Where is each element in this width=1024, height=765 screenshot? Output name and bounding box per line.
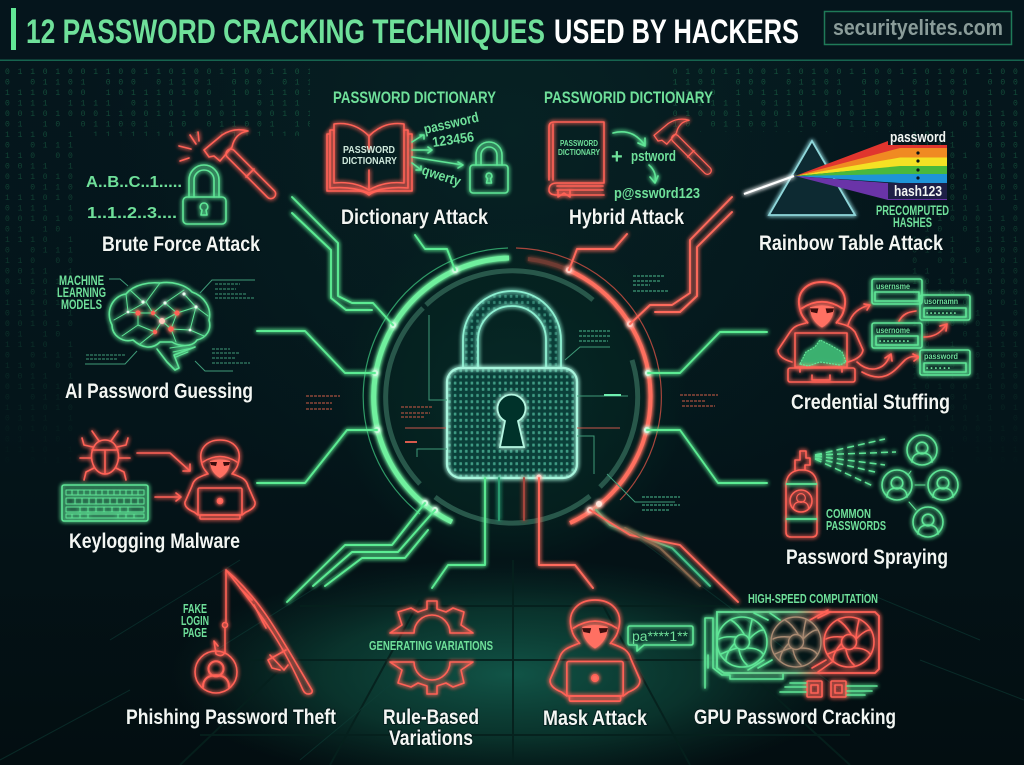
label: Rainbow Table Attack (759, 232, 943, 255)
curved arrows (848, 304, 947, 377)
caption: LEARNING (57, 285, 106, 300)
circuit wires: red (524, 197, 738, 602)
caption (181, 602, 209, 640)
form text: •••••• (926, 365, 951, 372)
sample words: qwerty (420, 162, 463, 189)
icon: green lock (470, 142, 508, 193)
caption: PASSWORDS (826, 518, 886, 533)
hash labels (890, 129, 946, 200)
word arrows (412, 135, 463, 170)
book text (558, 139, 601, 157)
target accounts (882, 435, 958, 537)
label: Rule-Based (383, 706, 479, 729)
caption (57, 273, 106, 312)
form text: •••••••• (926, 310, 957, 317)
light beam (744, 176, 794, 194)
panel: Rainbow Table Attack (744, 129, 949, 255)
can stripes (786, 484, 817, 519)
junction nodes (372, 267, 651, 513)
icon: bug (80, 431, 130, 480)
icon: closed book (549, 122, 604, 197)
icon: brain (109, 282, 210, 370)
caption: GENERATING VARIATIONS (369, 638, 493, 653)
panel: Rule-Based Variations (369, 601, 493, 750)
panel: Credential Stuffing (778, 279, 970, 414)
icon: fishing rod (195, 570, 312, 694)
caption: MACHINE (59, 273, 104, 288)
title: 12 PASSWORD CRACKING TECHNIQUES (26, 13, 545, 51)
website badge: securityelites.com (833, 15, 1003, 40)
icon: split gear (390, 601, 473, 694)
label: Variations (389, 727, 473, 750)
caption: PAGE (183, 626, 207, 640)
caption (826, 506, 886, 533)
caption: FAKE (183, 602, 207, 616)
book text: DICTIONARY (342, 155, 397, 167)
hash labels: hash123 (894, 183, 942, 200)
caption: LOGIN (181, 614, 209, 628)
traces (780, 683, 877, 695)
form text: password (924, 351, 958, 361)
spectrum (795, 141, 947, 200)
thin outer ring (363, 248, 661, 514)
brute force strings: 1..1..2..3.... (87, 205, 177, 222)
green arc (374, 258, 509, 522)
icon: hacker with laptop (550, 600, 640, 701)
label: Mask Attack (543, 707, 647, 730)
label: Credential Stuffing (791, 391, 950, 414)
dark inner ring (386, 271, 638, 523)
label: Password Spraying (786, 546, 948, 569)
padlock (447, 291, 577, 478)
form text: usernome (876, 325, 910, 335)
label (383, 706, 479, 750)
label: Phishing Password Theft (126, 706, 336, 729)
icon: open book (327, 124, 412, 195)
brute force strings (86, 174, 182, 222)
form text: usernsme (876, 281, 910, 291)
circuit wires: green (257, 197, 767, 602)
caption: HASHES (893, 215, 932, 230)
label: Dictionary Attack (341, 206, 488, 229)
panel: Phishing Password Theft (126, 570, 336, 729)
caption: PRECOMPUTED (876, 203, 949, 218)
icon: spray can (786, 451, 817, 537)
icon: graphics card (705, 610, 879, 697)
stolen credentials pile (800, 340, 846, 366)
sample words: 123456 (431, 128, 475, 150)
book text: PASSWORD (560, 139, 598, 148)
hybrid words and arrows (611, 132, 700, 202)
panel: AI Password Guessing (57, 273, 255, 403)
caption: PASSWORID DICTIONARY (544, 89, 713, 107)
hybrid words and arrows: + (611, 146, 623, 168)
caption: MODELS (61, 297, 102, 312)
caption: COMMON (826, 506, 871, 521)
spray stream (815, 439, 896, 486)
sample words: password (422, 109, 480, 137)
brute force strings: A..B..C..1..... (86, 174, 182, 191)
icon: lock and hammer (179, 130, 277, 224)
label: Keylogging Malware (69, 530, 240, 553)
panel: GPU Password Cracking (694, 592, 896, 729)
book text: PASSWORD (343, 144, 395, 156)
form text (876, 281, 958, 372)
login forms (872, 279, 970, 375)
label: AI Password Guessing (65, 380, 253, 403)
keyhole (497, 395, 525, 447)
panel: Dictionary Attack (327, 89, 508, 229)
hybrid words and arrows: p@ssw0rd123 (614, 185, 700, 202)
book text: DICTIONARY (558, 148, 601, 157)
icon: hacker with suitcase (778, 279, 970, 382)
book text (342, 144, 397, 167)
red arc (528, 259, 651, 523)
binary rain: top right (673, 68, 1018, 431)
masked password: pa****1** (632, 629, 689, 644)
icon: keyboard (62, 485, 148, 521)
micro annotations (306, 276, 718, 510)
form text: •••••••• (879, 338, 910, 345)
central emblem (306, 248, 718, 523)
speech bubble (628, 626, 693, 651)
arrows (137, 453, 190, 501)
sample words (420, 109, 480, 189)
panel: Brute Force Attack (86, 130, 277, 256)
binary rain: top left (5, 66, 310, 466)
label: GPU Password Cracking (694, 706, 896, 729)
chips (807, 681, 846, 697)
hybrid words and arrows: pstword (631, 148, 676, 165)
brain annotations (85, 279, 255, 371)
title accent bar (11, 8, 16, 50)
title: USED BY HACKERS (554, 13, 799, 51)
panel: Mask Attack (543, 600, 693, 730)
panel: Keylogging Malware (62, 431, 255, 553)
label: Brute Force Attack (102, 233, 260, 256)
panel: Password Spraying (786, 435, 958, 569)
icon: prism (744, 141, 947, 215)
label: Hybrid Attack (569, 206, 684, 229)
website badge (824, 12, 1012, 44)
form text: usornamn (924, 296, 958, 306)
caption: PASSWORD DICTIONARY (333, 89, 496, 107)
icon: hacker with laptop (185, 440, 255, 519)
caption (876, 203, 949, 230)
header (0, 0, 1024, 61)
panel: Hybrid Attack (544, 89, 713, 229)
caption: HIGH-SPEED COMPUTATION (748, 592, 878, 606)
hash labels: password (890, 129, 946, 146)
icon: hammer (654, 119, 713, 176)
